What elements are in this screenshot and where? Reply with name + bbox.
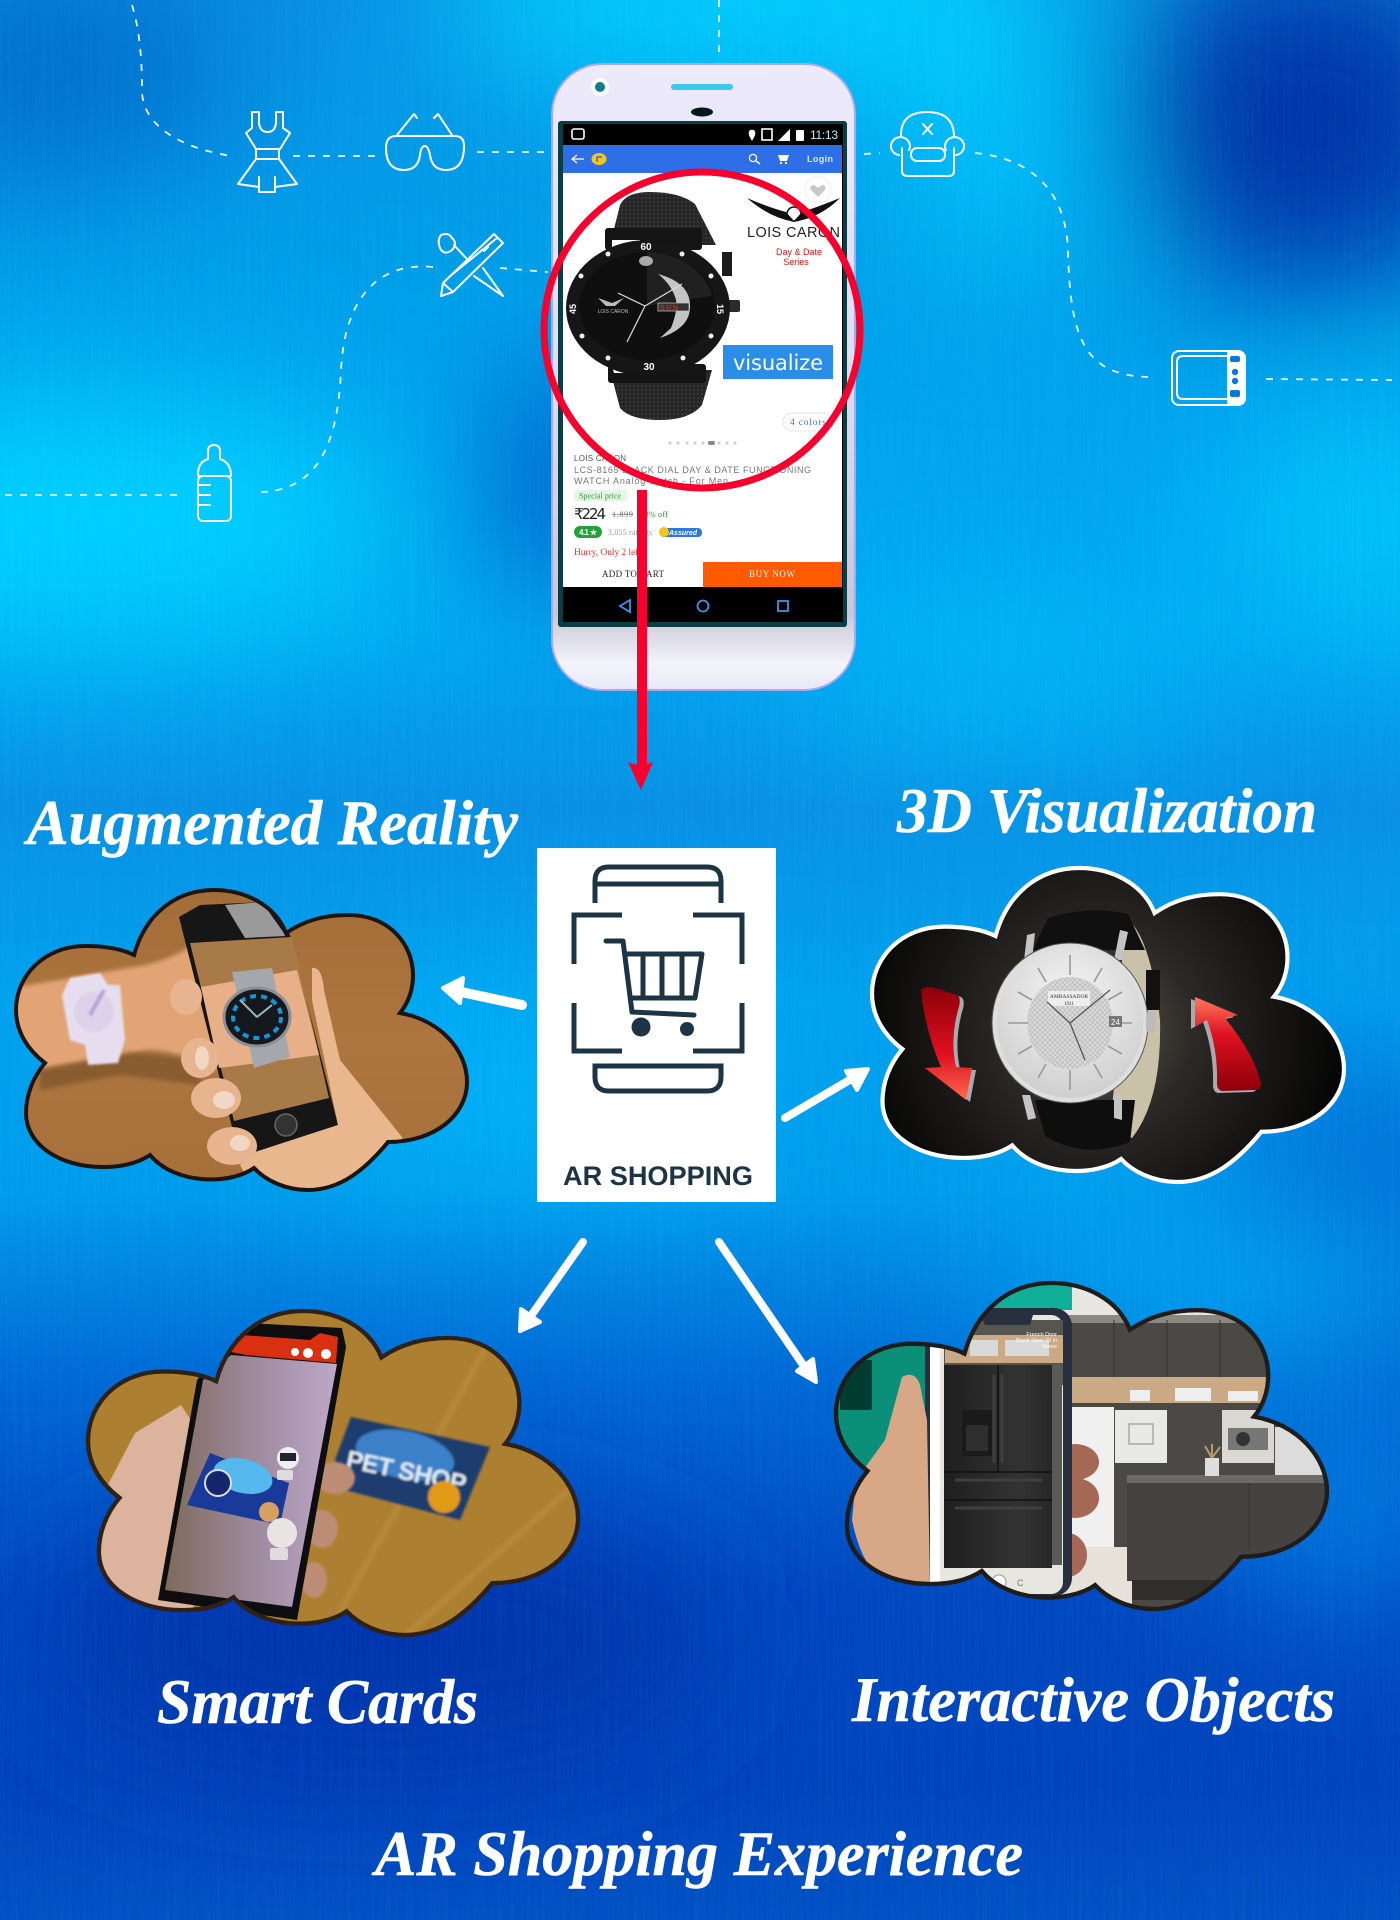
card on screen — [187, 1452, 289, 1525]
lugs — [1022, 930, 1128, 1120]
icon: dress — [238, 112, 297, 192]
cloud: interactive objects scene — [830, 1275, 1340, 1620]
cloud outline — [872, 868, 1344, 1182]
hand thumb and palm — [852, 1375, 930, 1590]
brand logo and series — [747, 198, 840, 267]
red rotation arrow left — [921, 987, 976, 1102]
visualize button: visualize — [733, 351, 823, 375]
fingers behind phone — [301, 1462, 355, 1598]
cloud: 3D visualization scene: 24 — [1111, 1018, 1120, 1027]
brand plate: 1921 — [1064, 1002, 1074, 1007]
dashed connector lines — [5, 0, 1392, 495]
product watch: 60 — [640, 242, 652, 253]
cloud: smart cards scene — [80, 1300, 590, 1640]
phone — [179, 902, 338, 1153]
arrow to interactive objects — [719, 1242, 816, 1382]
shutter control: C — [1017, 1578, 1024, 1588]
buy now button — [703, 562, 842, 587]
product description: WATCH Analog Watch - For Men — [574, 476, 728, 486]
paper watch on wrist — [62, 973, 125, 1065]
white product page — [563, 173, 842, 562]
wishlist heart — [805, 177, 831, 203]
phone — [158, 1323, 346, 1620]
AR product caption: Home — [1042, 1344, 1057, 1350]
product description: LOIS CARON — [574, 454, 626, 463]
heading: Interactive Objects: Interactive Objects — [851, 1665, 1335, 1735]
phone screen — [165, 1355, 337, 1607]
card label: AR SHOPPING — [563, 1161, 753, 1191]
phone frame — [925, 1308, 1072, 1596]
brand logo and series: Series — [783, 257, 809, 267]
product watch: 30 — [643, 362, 655, 373]
arrow to smart cards — [520, 1242, 583, 1331]
icon: armchair — [891, 112, 964, 176]
hands and date — [1047, 990, 1110, 1060]
forearm — [18, 946, 218, 1072]
real business card — [335, 1417, 490, 1520]
price: 88% off — [640, 509, 668, 519]
price: 1,899 — [612, 509, 633, 519]
android navigation bar — [620, 600, 788, 612]
heading: Smart Cards: Smart Cards — [157, 1667, 478, 1737]
rating and assured badge: Assured — [668, 530, 698, 537]
phone sensor — [691, 108, 713, 116]
status bar: 11:13 — [810, 128, 838, 142]
phone body — [552, 64, 855, 690]
product description — [574, 454, 811, 486]
main title: AR Shopping Experience — [371, 1819, 1023, 1889]
holding hand left — [90, 1405, 210, 1640]
carousel dots — [668, 441, 737, 445]
real business card: PET SHOP — [344, 1445, 469, 1498]
rating and assured badge: 3,055 ratings — [608, 528, 652, 537]
app bar: Login — [807, 154, 833, 164]
cloud: augmented reality scene — [0, 880, 480, 1200]
rating and assured badge: 4.1 ★ — [579, 528, 598, 537]
holding hand — [240, 968, 402, 1200]
phone screen — [933, 1315, 1063, 1594]
AR product caption — [1016, 1332, 1057, 1350]
stock warning: Hurry, Only 2 left! — [574, 547, 644, 558]
special price tag: Special price — [579, 492, 621, 500]
cloud outline — [836, 1283, 1327, 1609]
refrigerator — [944, 1365, 1052, 1568]
product watch: 15 — [715, 304, 725, 314]
brand logo and series: LOIS CARON — [747, 225, 840, 241]
panel: AR shopping card — [537, 848, 776, 1202]
red arrow down — [628, 490, 653, 790]
status bar — [572, 128, 838, 142]
phone screen — [558, 121, 847, 627]
price: ₹224 — [574, 505, 606, 523]
teal wall — [830, 1340, 940, 1480]
icon: baby bottle — [198, 445, 231, 521]
brand plate: AMBASSADOR — [1050, 994, 1088, 1000]
heading: 3D Visualization: 3D Visualization — [896, 776, 1317, 846]
special price tag — [574, 490, 627, 501]
arrow to augmented reality — [443, 978, 522, 1005]
leather straps — [1033, 910, 1145, 950]
cloud outline — [88, 1311, 578, 1635]
app header — [231, 1333, 338, 1363]
product watch: 45 — [568, 304, 578, 314]
AR overlay buttons — [267, 1447, 299, 1560]
watch case and dial — [992, 943, 1148, 1103]
smartphone with shopping app — [552, 64, 855, 690]
product watch: LOIS CARON — [598, 309, 629, 315]
cloud: 3D visualization scene — [860, 860, 1360, 1190]
icon: television — [1172, 351, 1245, 405]
red highlight circle — [544, 172, 860, 488]
AR product caption: French Door — [1026, 1332, 1057, 1338]
product watch: SUN — [660, 305, 678, 312]
heading: Augmented Reality: Augmented Reality — [23, 788, 519, 858]
product watch — [566, 192, 740, 420]
colours pill: 4 colors — [790, 418, 826, 428]
kitchen backdrop — [1060, 1275, 1340, 1620]
add to cart button — [563, 562, 703, 587]
colours pill — [783, 413, 833, 431]
strap inner lining — [1110, 915, 1160, 1138]
app bar — [563, 145, 842, 173]
phone camera — [591, 78, 609, 96]
product description: LCS-8165 BLACK DIAL DAY & DATE FUNCTIONING — [574, 465, 811, 475]
AR product caption: Black Steel 70 in — [1016, 1338, 1057, 1344]
shutter control — [992, 1575, 1024, 1589]
rating and assured badge — [574, 526, 702, 538]
icon: brush and pencil — [439, 234, 503, 296]
phone speaker — [671, 84, 733, 90]
screen watch — [232, 968, 290, 1068]
icon: glasses — [386, 114, 464, 170]
icon: phone frame with cart — [574, 867, 742, 1091]
brand logo and series: Day & Date — [776, 247, 822, 257]
phone screen — [190, 937, 329, 1121]
fingers — [1047, 1444, 1099, 1577]
dial indices — [1008, 955, 1132, 1090]
cloud outline — [16, 890, 467, 1190]
red rotation arrow right — [1191, 997, 1261, 1093]
buy now button: BUY NOW — [749, 569, 796, 579]
brand plate — [1048, 991, 1090, 1007]
arrow to 3D visualization — [785, 1069, 868, 1118]
price — [574, 505, 668, 523]
visualize button — [723, 345, 833, 379]
add to cart button: ADD TO CART — [602, 569, 664, 579]
